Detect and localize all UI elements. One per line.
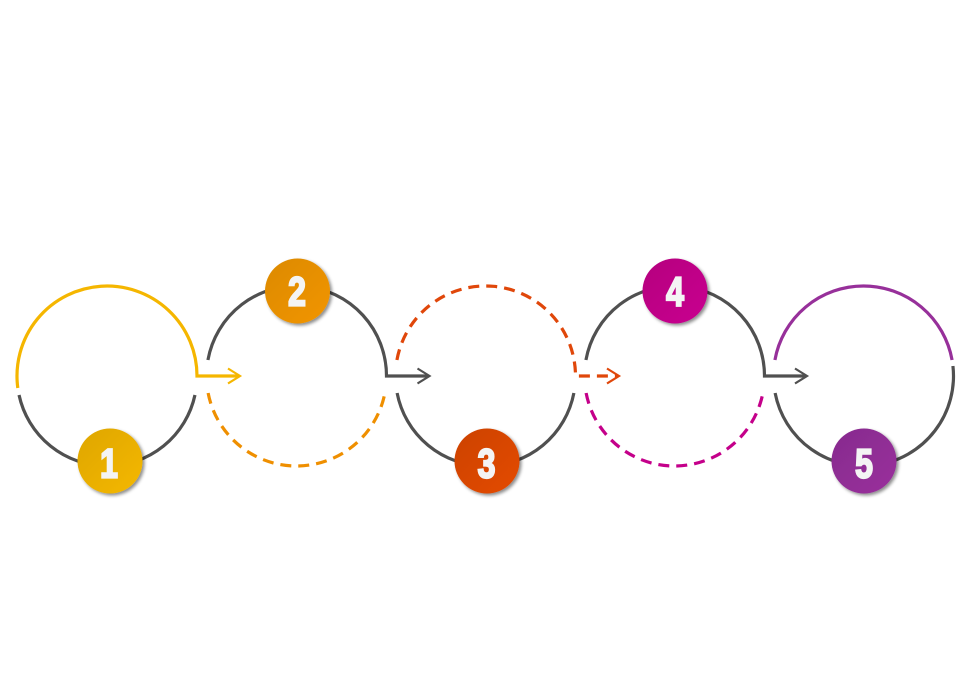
step 4 badge: 4: [666, 269, 684, 314]
step 3 upper dashed arc and arrow: [397, 286, 617, 376]
step 3 arrow head: [607, 368, 619, 384]
step 5 badge: [832, 428, 896, 494]
step 2 lower dashed arc: [208, 393, 385, 466]
step 5 lower arc: [775, 366, 953, 466]
step 1: [17, 286, 240, 494]
step 5: [775, 286, 953, 494]
step 3 lower arc: [397, 393, 574, 466]
step 5 badge: 5: [855, 441, 873, 486]
step 1 badge: 1: [100, 441, 118, 486]
step 4 badge: [642, 258, 708, 324]
step 1 badge: [78, 428, 142, 494]
step 2 badge: 2: [288, 269, 306, 314]
step 4: [586, 258, 807, 466]
step 5 upper arc: [775, 286, 952, 360]
step 1 lower arc: [19, 395, 195, 466]
step 4 lower dashed arc: [586, 393, 763, 466]
step 2 upper arc and arrow: [208, 286, 430, 384]
step 2 badge: [265, 258, 330, 324]
step 2: [208, 258, 430, 466]
step 1 upper arc and arrow: [17, 286, 240, 388]
step 3 badge: [454, 428, 520, 494]
step 4 upper arc and arrow: [586, 286, 807, 384]
step 3 badge: 3: [478, 441, 495, 486]
step 3: [397, 286, 619, 494]
